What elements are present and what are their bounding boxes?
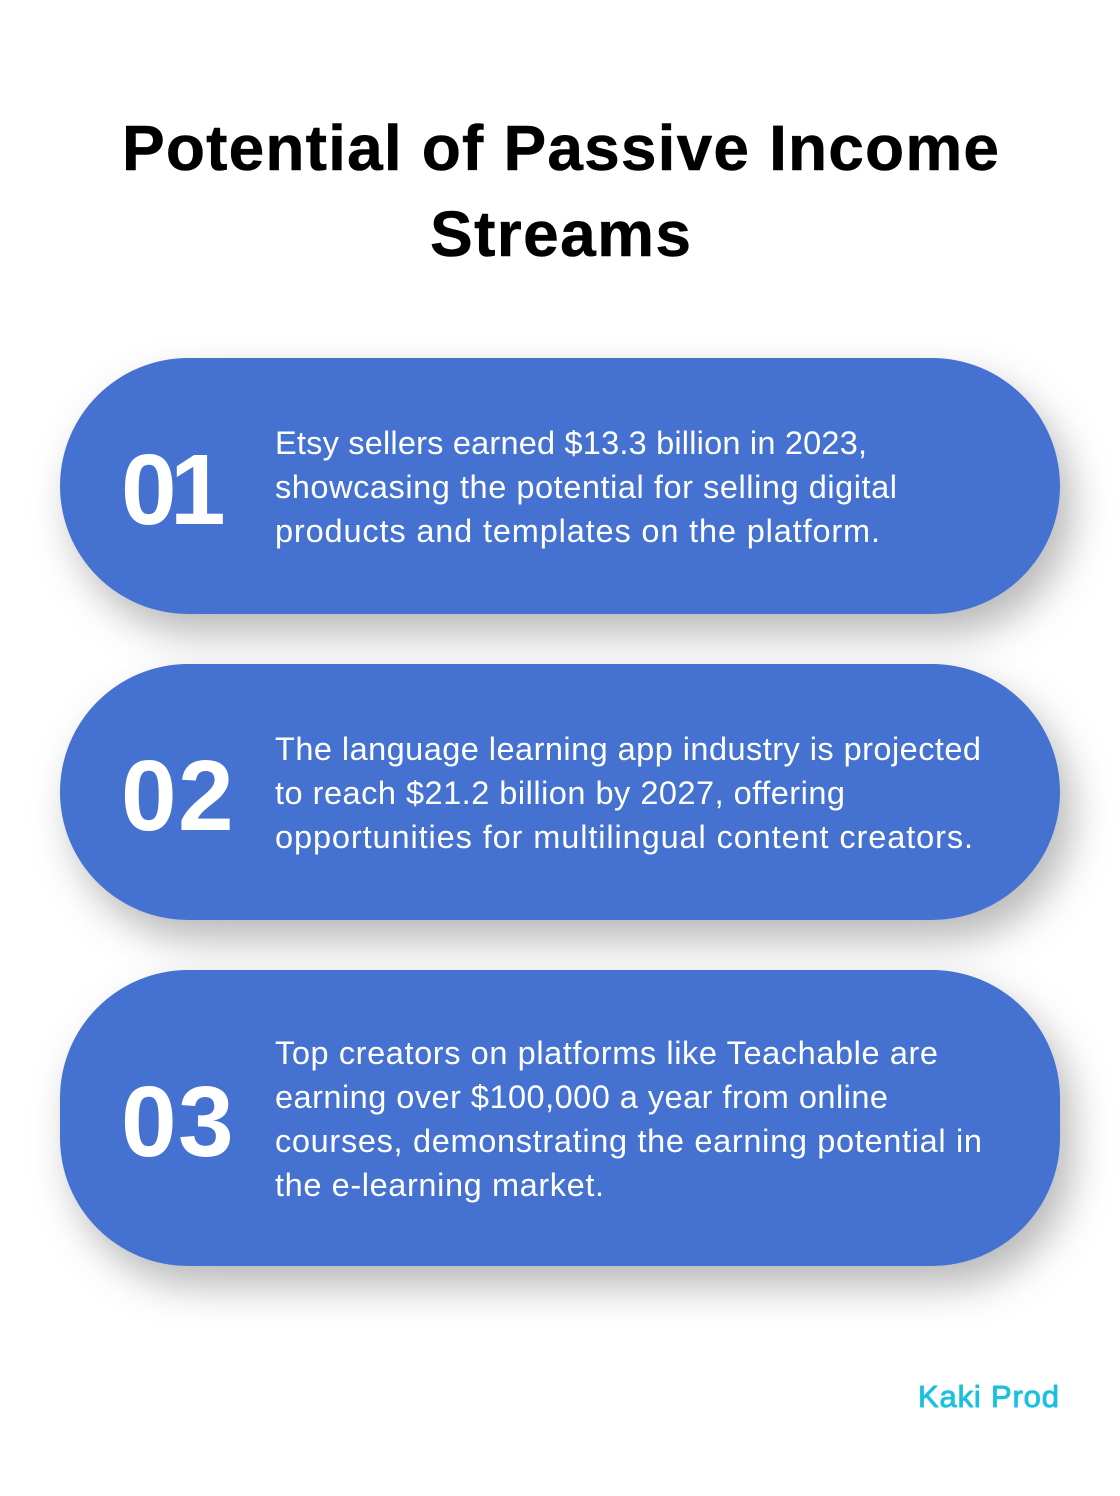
panel: step 01 [60,358,1060,614]
text block 03 [275,1035,982,1203]
text block 03: courses, demonstrating the earning potential in [275,1123,982,1159]
panel: step 03 [60,970,1060,1266]
panel: step 02 [60,664,1060,920]
title [122,112,999,270]
text block 02: opportunities for multilingual content creators. [275,819,973,855]
text block 03: Top creators on platforms like Teachable are [275,1035,938,1071]
number 03: 03 [121,1066,234,1178]
number 01: 01 [121,434,226,546]
title: Potential of Passive Income [122,112,999,184]
text block 03: earning over $100,000 a year from online [275,1079,888,1115]
text block 01: products and templates on the platform. [275,513,880,549]
text block 01: showcasing the potential for selling digital [275,469,897,505]
text block 03: the e-learning market. [275,1167,604,1203]
text block 02: The language learning app industry is projected [275,731,981,767]
text block 02 [275,731,981,855]
logo: Kaki Prod: Kaki Prod [918,1379,1059,1414]
text block 02: to reach $21.2 billion by 2027, offering [275,775,845,811]
title: Streams [430,198,691,270]
text block 01: Etsy sellers earned $13.3 billion in 2023, [275,425,867,461]
text block 01 [275,425,897,549]
number 02: 02 [121,740,234,852]
